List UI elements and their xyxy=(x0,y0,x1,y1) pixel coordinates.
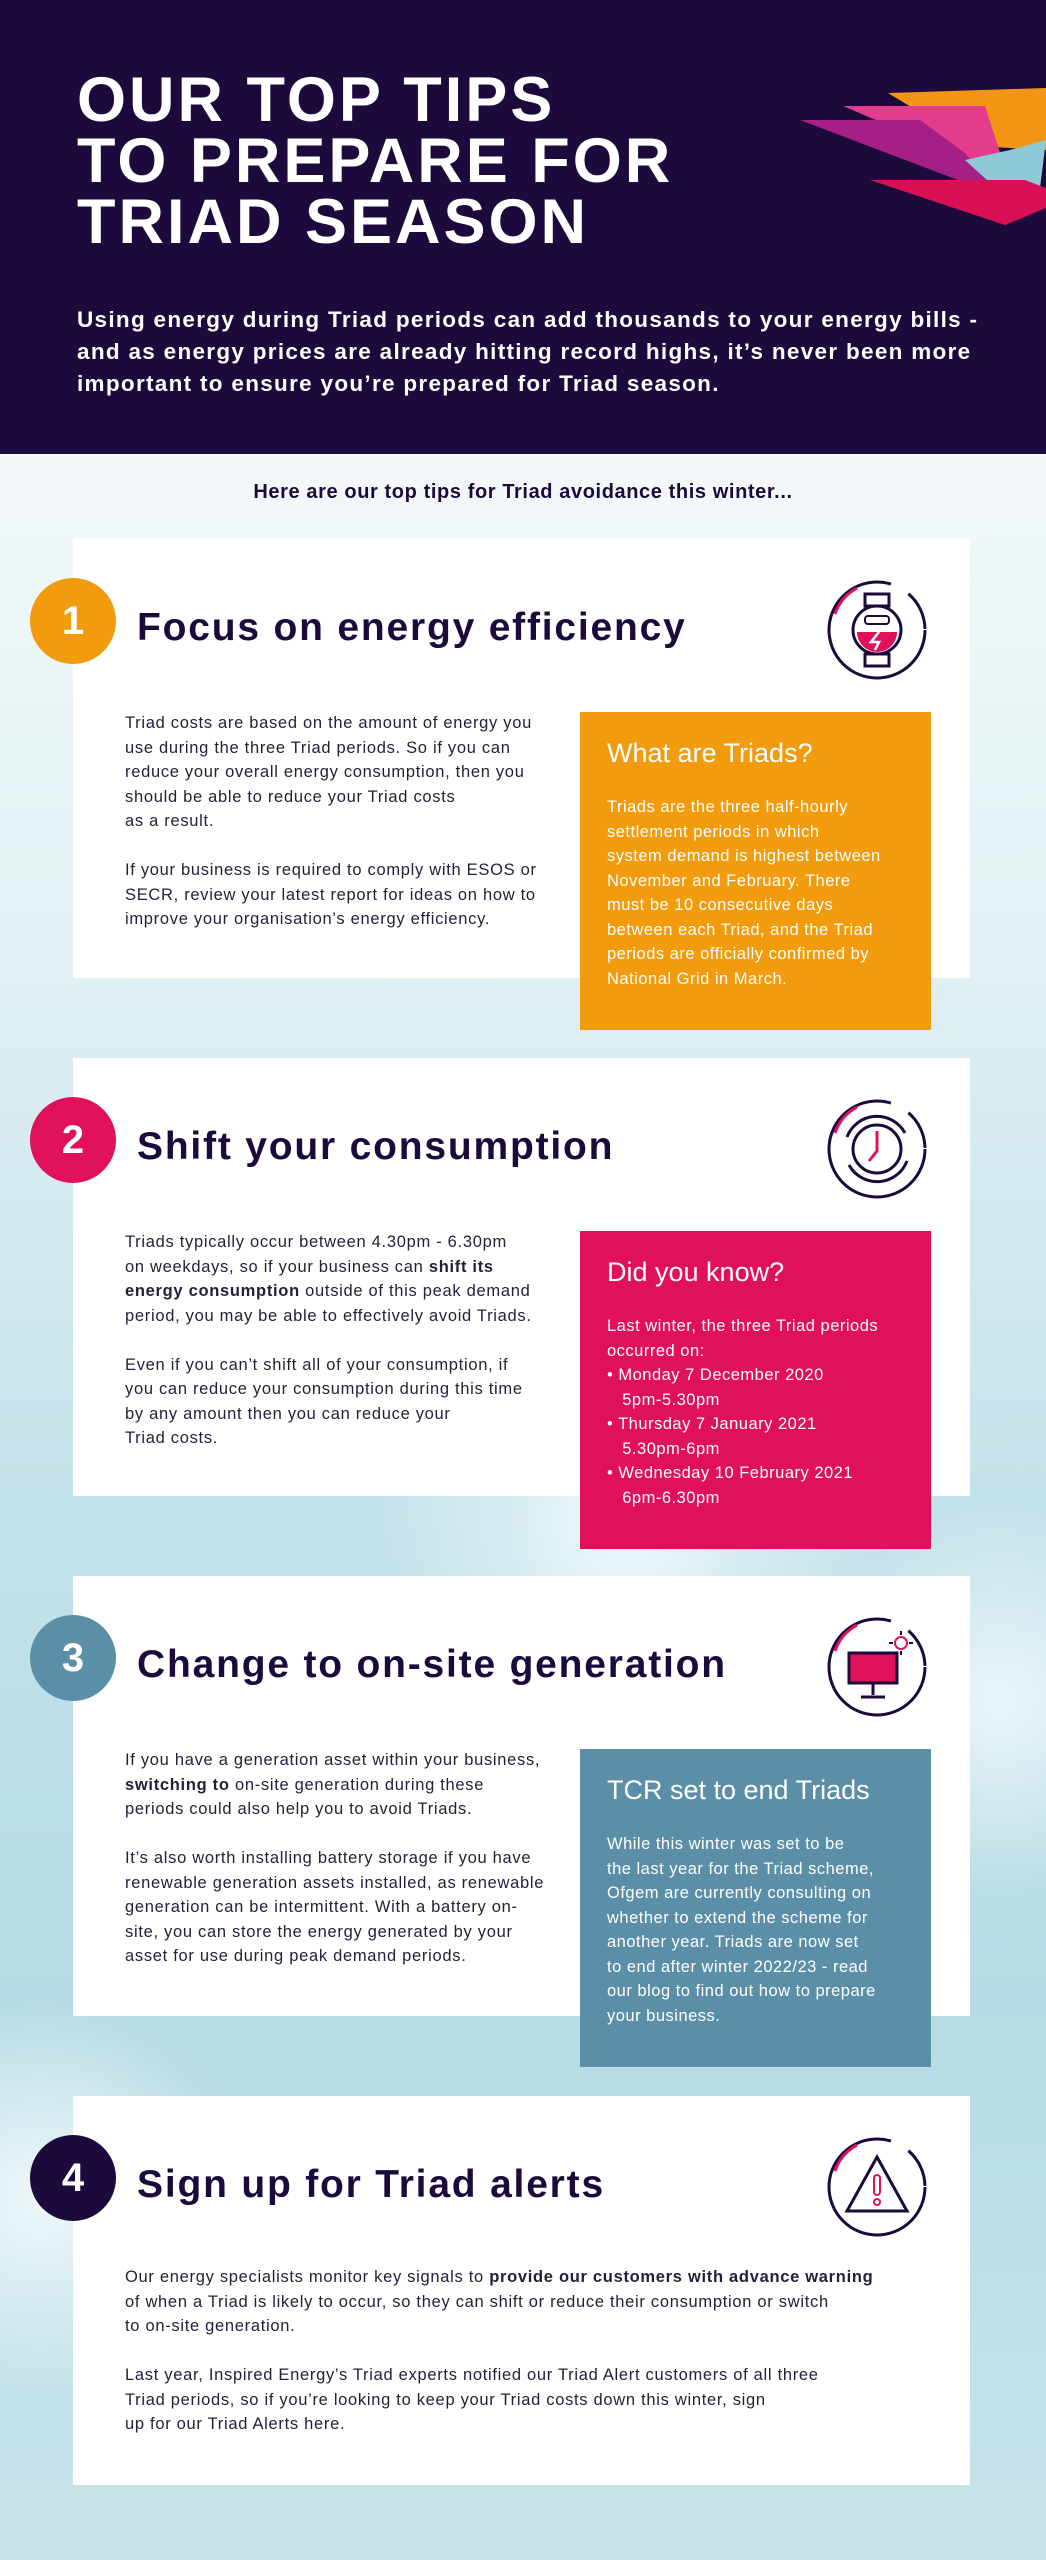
body text 3: renewable generation assets installed, as renewable xyxy=(125,1874,544,1892)
number badge 1 xyxy=(30,578,116,664)
callout: what are triads: November and February. There xyxy=(607,872,851,890)
callout: TCR: TCR set to end Triads xyxy=(607,1775,870,1805)
callout: TCR xyxy=(580,1749,931,2067)
callout: did you know: • Wednesday 10 February 2021 xyxy=(607,1464,853,1482)
callout: what are triads xyxy=(580,712,931,1030)
title xyxy=(77,65,673,257)
body text 1: use during the three Triad periods. So if you can xyxy=(125,738,511,756)
body text 3: site, you can store the energy generated by your xyxy=(125,1922,513,1940)
body text 1 xyxy=(125,714,537,928)
panel: tip 3 xyxy=(73,1576,970,2016)
number badge 2 xyxy=(30,1097,116,1183)
callout: what are triads: What are Triads? xyxy=(607,738,813,768)
callout: did you know: • Monday 7 December 2020 xyxy=(607,1366,824,1384)
body text 4: Our energy specialists monitor key signals to provide our customers with advance warning xyxy=(125,2268,873,2286)
callout: did you know: 5.30pm-6pm xyxy=(622,1440,720,1458)
callout: did you know: 6pm-6.30pm xyxy=(622,1488,720,1506)
body text 2: Triad costs. xyxy=(125,1429,218,1447)
heading 4: Sign up for Triad alerts xyxy=(137,2163,605,2206)
number badge 3 xyxy=(30,1615,116,1701)
body text 1: improve your organisation’s energy efficiency. xyxy=(125,910,490,928)
callout: what are triads: must be 10 consecutive days xyxy=(607,896,833,914)
callout: did you know: occurred on: xyxy=(607,1342,705,1360)
body text 2: Triads typically occur between 4.30pm - 6.30pm xyxy=(125,1233,507,1251)
panel: tip 1 xyxy=(73,539,970,978)
body text 2: energy consumption outside of this peak demand xyxy=(125,1282,530,1300)
body text 1: SECR, review your latest report for ideas on how to xyxy=(125,886,536,904)
number badge 1: 1 xyxy=(62,599,84,643)
callout: TCR: another year. Triads are now set xyxy=(607,1933,859,1951)
callout: did you know: • Thursday 7 January 2021 xyxy=(607,1415,817,1433)
body text 4: of when a Triad is likely to occur, so they can shift or reduce their consumption or switch xyxy=(125,2292,829,2310)
body text 1: as a result. xyxy=(125,812,214,830)
body text 2: you can reduce your consumption during this time xyxy=(125,1380,523,1398)
body text 3: asset for use during peak demand periods. xyxy=(125,1947,466,1965)
body text 3: periods could also help you to avoid Triads. xyxy=(125,1800,472,1818)
icon: solar panel xyxy=(828,1618,926,1716)
callout: did you know: Last winter, the three Triad periods xyxy=(607,1317,878,1335)
callout: TCR: While this winter was set to be xyxy=(607,1835,844,1853)
subtitle: important to ensure you’re prepared for Triad season. xyxy=(77,371,720,396)
body text 3: If you have a generation asset within your business, xyxy=(125,1751,540,1769)
callout: TCR: to end after winter 2022/23 - read xyxy=(607,1958,868,1976)
panel: tip 4 xyxy=(73,2096,970,2485)
title: TO PREPARE FOR xyxy=(77,126,673,196)
callout: did you know: Did you know? xyxy=(607,1257,784,1287)
body text 2: Even if you can’t shift all of your consumption, if xyxy=(125,1356,508,1374)
body text 2 xyxy=(125,1233,532,1447)
title: TRIAD SEASON xyxy=(77,187,589,257)
subtitle xyxy=(77,307,978,396)
panel: tip 2 xyxy=(73,1058,970,1496)
body text 1: If your business is required to comply with ESOS or xyxy=(125,861,537,879)
body text 3: It’s also worth installing battery storage if you have xyxy=(125,1849,531,1867)
body text 1: should be able to reduce your Triad costs xyxy=(125,788,455,806)
icon: clock xyxy=(828,1100,926,1198)
body text 2: on weekdays, so if your business can shift its xyxy=(125,1258,494,1276)
callout: did you know: 5pm-5.30pm xyxy=(622,1390,720,1408)
subtitle: Using energy during Triad periods can add thousands to your energy bills - xyxy=(77,307,978,332)
callout: what are triads: periods are officially confirmed by xyxy=(607,945,869,963)
callout: what are triads: settlement periods in which xyxy=(607,822,820,840)
body text 1: reduce your overall energy consumption, then you xyxy=(125,763,525,781)
heading 3: Change to on-site generation xyxy=(137,1643,727,1686)
body text 4 xyxy=(125,2268,873,2433)
subtitle: and as energy prices are already hitting record highs, it’s never been more xyxy=(77,339,971,364)
body text 2: period, you may be able to effectively avoid Triads. xyxy=(125,1306,532,1324)
body text 3 xyxy=(125,1751,544,1965)
number badge 3: 3 xyxy=(62,1636,84,1680)
header band xyxy=(0,0,1046,454)
callout: what are triads: Triads are the three half-hourly xyxy=(607,798,848,816)
body text 3: switching to on-site generation during these xyxy=(125,1776,484,1794)
body text 3: generation can be intermittent. With a battery on- xyxy=(125,1898,518,1916)
number badge 2: 2 xyxy=(62,1118,84,1162)
body text 1: Triad costs are based on the amount of energy you xyxy=(125,714,532,732)
icon: meter xyxy=(828,580,926,680)
callout: TCR: your business. xyxy=(607,2006,720,2024)
callout: what are triads: system demand is highest between xyxy=(607,847,881,865)
callout: did you know xyxy=(580,1231,931,1549)
heading 2: Shift your consumption xyxy=(137,1125,614,1168)
body text 4: up for our Triad Alerts here. xyxy=(125,2415,345,2433)
number badge 4: 4 xyxy=(62,2156,84,2200)
logo graphic xyxy=(800,88,1046,225)
callout: TCR: whether to extend the scheme for xyxy=(607,1908,868,1926)
body text 2: by any amount then you can reduce your xyxy=(125,1404,451,1422)
callout: TCR: the last year for the Triad scheme, xyxy=(607,1860,874,1878)
intro line: Here are our top tips for Triad avoidance this winter... xyxy=(253,481,793,503)
callout: TCR: our blog to find out how to prepare xyxy=(607,1982,876,2000)
title: OUR TOP TIPS xyxy=(77,65,555,135)
body text 4: Triad periods, so if you’re looking to keep your Triad costs down this winter, sign xyxy=(125,2390,766,2408)
heading 1: Focus on energy efficiency xyxy=(137,606,687,649)
body text 4: Last year, Inspired Energy’s Triad experts notified our Triad Alert customers of all three xyxy=(125,2366,819,2384)
callout: TCR: Ofgem are currently consulting on xyxy=(607,1884,871,1902)
callout: what are triads: between each Triad, and the Triad xyxy=(607,920,873,938)
body text 4: to on-site generation. xyxy=(125,2317,295,2335)
callout: what are triads: National Grid in March. xyxy=(607,970,787,988)
icon: warning xyxy=(828,2138,926,2236)
number badge 4 xyxy=(30,2135,116,2221)
